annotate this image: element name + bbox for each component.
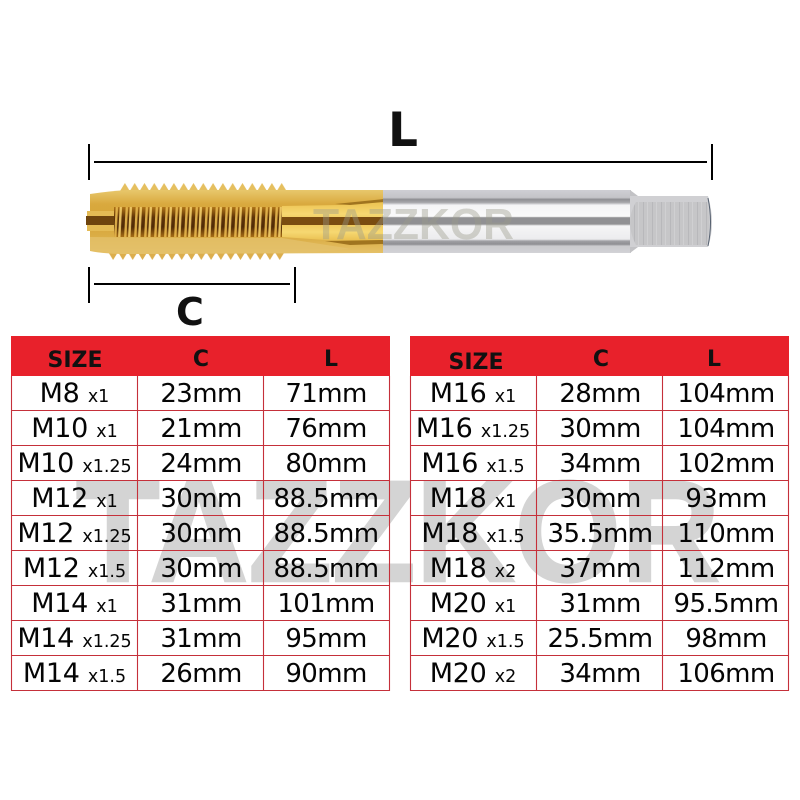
end edge	[708, 198, 710, 246]
C right tick	[294, 267, 296, 303]
rows: M18 x1.5	[421, 518, 525, 549]
grid	[410, 376, 788, 690]
header labels: C	[593, 347, 609, 372]
neck chamfer	[630, 190, 638, 253]
rows: 30mm	[160, 519, 242, 549]
rows: M10 x1.25	[17, 448, 132, 479]
rows: 112mm	[677, 554, 775, 584]
left size table	[11, 336, 390, 690]
rows: 88.5mm	[274, 554, 378, 584]
rows: M14 x1.25	[17, 623, 132, 654]
rows: 26mm	[160, 659, 242, 689]
rows: 21mm	[160, 414, 242, 444]
rows: M12 x1.25	[17, 518, 132, 549]
rows: M16 x1.5	[421, 448, 525, 479]
rows: M14 x1.5	[23, 658, 126, 689]
lower flute edge	[325, 240, 384, 245]
header band	[11, 336, 390, 376]
rows: M16 x1	[430, 378, 516, 409]
rows: M12 x1	[31, 483, 118, 514]
rows: 31mm	[160, 589, 242, 619]
rows: 31mm	[559, 589, 641, 619]
C label: C	[176, 290, 204, 334]
C left tick	[88, 267, 90, 303]
rows: 90mm	[285, 659, 367, 689]
upper flute edge	[335, 199, 384, 205]
header labels: SIZE	[448, 350, 504, 375]
rows: M20 x2	[430, 658, 516, 689]
header labels	[448, 347, 721, 375]
header labels: C	[193, 347, 209, 372]
C line	[94, 283, 290, 285]
rows: M20 x1	[430, 588, 516, 619]
rows: 104mm	[677, 379, 775, 409]
rows: 35.5mm	[548, 519, 652, 549]
rows: M18 x1	[430, 483, 516, 514]
rows: 25.5mm	[548, 624, 652, 654]
small watermark on tap: TAZZKOR	[313, 200, 514, 249]
central dark flute line	[282, 217, 384, 225]
rows: 76mm	[285, 414, 367, 444]
square drive end	[630, 196, 712, 247]
L label: L	[388, 103, 418, 158]
rows: 30mm	[160, 554, 242, 584]
header labels: SIZE	[47, 348, 103, 373]
rows: 71mm	[285, 379, 367, 409]
rows: M18 x2	[430, 553, 516, 584]
gold coated section	[90, 190, 384, 254]
rows: 24mm	[160, 449, 242, 479]
rows: 28mm	[559, 379, 641, 409]
rows: 95mm	[285, 624, 367, 654]
rows: 104mm	[677, 414, 775, 444]
header labels	[47, 347, 338, 373]
rows: M8 x1	[40, 378, 109, 409]
rows: 95.5mm	[674, 589, 778, 619]
rows: 102mm	[677, 449, 775, 479]
rows: 88.5mm	[274, 519, 378, 549]
rows: M14 x1	[31, 588, 118, 619]
right size table	[410, 336, 789, 690]
watermark: large TAZZKOR: TAZZKOR	[76, 451, 720, 612]
tap tool illustration	[86, 183, 712, 260]
rows: 31mm	[160, 624, 242, 654]
rows: M10 x1	[31, 413, 118, 444]
rows: 37mm	[559, 554, 641, 584]
rows	[17, 378, 378, 689]
L left tick	[88, 144, 90, 180]
L right tick	[711, 144, 713, 180]
grid	[12, 376, 390, 690]
rows: 106mm	[677, 659, 775, 689]
rows: 98mm	[685, 624, 767, 654]
header labels: L	[707, 347, 721, 372]
tip	[87, 211, 117, 231]
rows: 34mm	[559, 449, 641, 479]
rows: 110mm	[677, 519, 775, 549]
lower land highlight	[90, 237, 352, 254]
square flat face	[630, 202, 709, 245]
rows: 30mm	[559, 484, 641, 514]
header labels: L	[324, 347, 338, 372]
rows: 80mm	[285, 449, 367, 479]
rows: M12 x1.5	[23, 553, 126, 584]
bright central flute land	[282, 202, 384, 242]
rows: 93mm	[685, 484, 767, 514]
rows: M20 x1.5	[421, 623, 525, 654]
icon: bottom thread teeth	[108, 252, 284, 260]
rows: 101mm	[277, 589, 375, 619]
rows: 30mm	[160, 484, 242, 514]
L line	[94, 161, 707, 163]
rows	[416, 378, 778, 689]
rows: M16 x1.25	[416, 413, 530, 444]
silver shank	[383, 190, 631, 253]
rows: 88.5mm	[274, 484, 378, 514]
header band	[410, 336, 789, 376]
rows: 34mm	[559, 659, 641, 689]
rows: 23mm	[160, 379, 242, 409]
threaded flute	[114, 207, 282, 237]
rows: 30mm	[559, 414, 641, 444]
icon: top thread teeth	[120, 183, 286, 191]
